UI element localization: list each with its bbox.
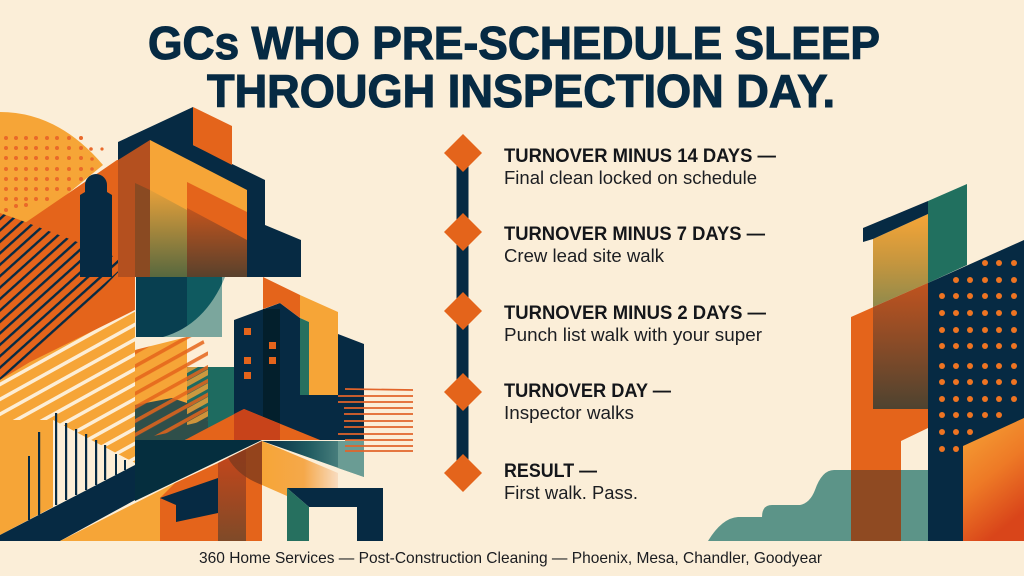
dark teal band xyxy=(135,440,262,501)
footer: 360 Home Services — Post-Construction Cleaning — Phoenix, Mesa, Chandler, Goodyear xyxy=(199,550,823,567)
step 1 xyxy=(444,134,776,188)
translucent shaded wall xyxy=(135,183,247,277)
orange inner facade xyxy=(187,182,247,277)
navy middle building xyxy=(234,303,364,440)
step 5 xyxy=(444,454,638,503)
yellow lower wedge xyxy=(60,483,175,541)
navy roof xyxy=(863,201,928,242)
step 4 xyxy=(444,373,671,423)
cream panel behind bars xyxy=(53,420,135,507)
illustration: right abstract building xyxy=(708,184,1024,541)
navy portal xyxy=(287,488,383,541)
teal sliver xyxy=(300,318,309,395)
navy hatched wedge xyxy=(0,213,118,380)
brown pillar stripe xyxy=(218,449,246,541)
orange tower xyxy=(851,283,928,541)
orange top facade xyxy=(263,277,300,318)
yellow sun with orange dots xyxy=(0,112,104,240)
step 2 xyxy=(444,213,765,266)
orange pillar xyxy=(160,441,262,541)
step 1: Final clean locked on schedule xyxy=(504,168,757,188)
vertical bars xyxy=(28,413,126,520)
step 3: Punch list walk with your super xyxy=(504,325,762,345)
step 5: RESULT — xyxy=(504,461,597,482)
step 5: First walk. Pass. xyxy=(504,483,638,503)
teal portal leg xyxy=(287,488,309,541)
dark arc overlap xyxy=(228,441,262,485)
hill overlap xyxy=(851,470,901,541)
title: THROUGH INSPECTION DAY. xyxy=(207,65,835,117)
teal fading wedge xyxy=(262,441,364,477)
yellow lower block xyxy=(0,420,53,535)
timeline spine xyxy=(456,160,468,465)
dark column xyxy=(263,309,280,440)
orange slope xyxy=(0,160,150,380)
pale teal arc xyxy=(163,277,225,337)
step 3 xyxy=(444,292,766,345)
navy diagonal band xyxy=(0,465,135,541)
yellow right facade xyxy=(300,295,338,395)
yellow upper facade xyxy=(150,140,247,277)
step 2: TURNOVER MINUS 7 DAYS — xyxy=(504,224,765,245)
teal block xyxy=(136,277,222,337)
title xyxy=(148,17,880,117)
upper navy roof block xyxy=(118,107,301,277)
windows xyxy=(244,328,276,379)
orange horizontal lines xyxy=(338,389,413,451)
step 4: TURNOVER DAY — xyxy=(504,381,671,402)
yellow fading wedge xyxy=(262,441,338,496)
navy dotted facade xyxy=(928,240,1024,541)
step 1: TURNOVER MINUS 14 DAYS — xyxy=(504,146,776,167)
teal tower xyxy=(928,184,967,283)
dark shaded panel xyxy=(873,283,928,409)
tower silhouette xyxy=(80,174,112,277)
orange gable roof xyxy=(185,409,320,440)
orange dots xyxy=(939,260,1017,452)
teal hill xyxy=(708,470,928,541)
timeline xyxy=(444,134,776,503)
step 4: Inspector walks xyxy=(504,403,634,423)
step 2: Crew lead site walk xyxy=(504,246,665,266)
title: GCs WHO PRE-SCHEDULE SLEEP xyxy=(148,17,880,69)
brown shaded column xyxy=(118,140,150,277)
illustration: left abstract buildings xyxy=(0,107,413,541)
navy flag xyxy=(160,478,218,522)
gradient corner block xyxy=(963,418,1024,541)
orange roof corner xyxy=(193,107,232,165)
cream and yellow hatching xyxy=(0,310,135,463)
orange hatch block xyxy=(135,337,234,440)
step 3: TURNOVER MINUS 2 DAYS — xyxy=(504,303,766,324)
yellow upper facade xyxy=(873,214,928,307)
